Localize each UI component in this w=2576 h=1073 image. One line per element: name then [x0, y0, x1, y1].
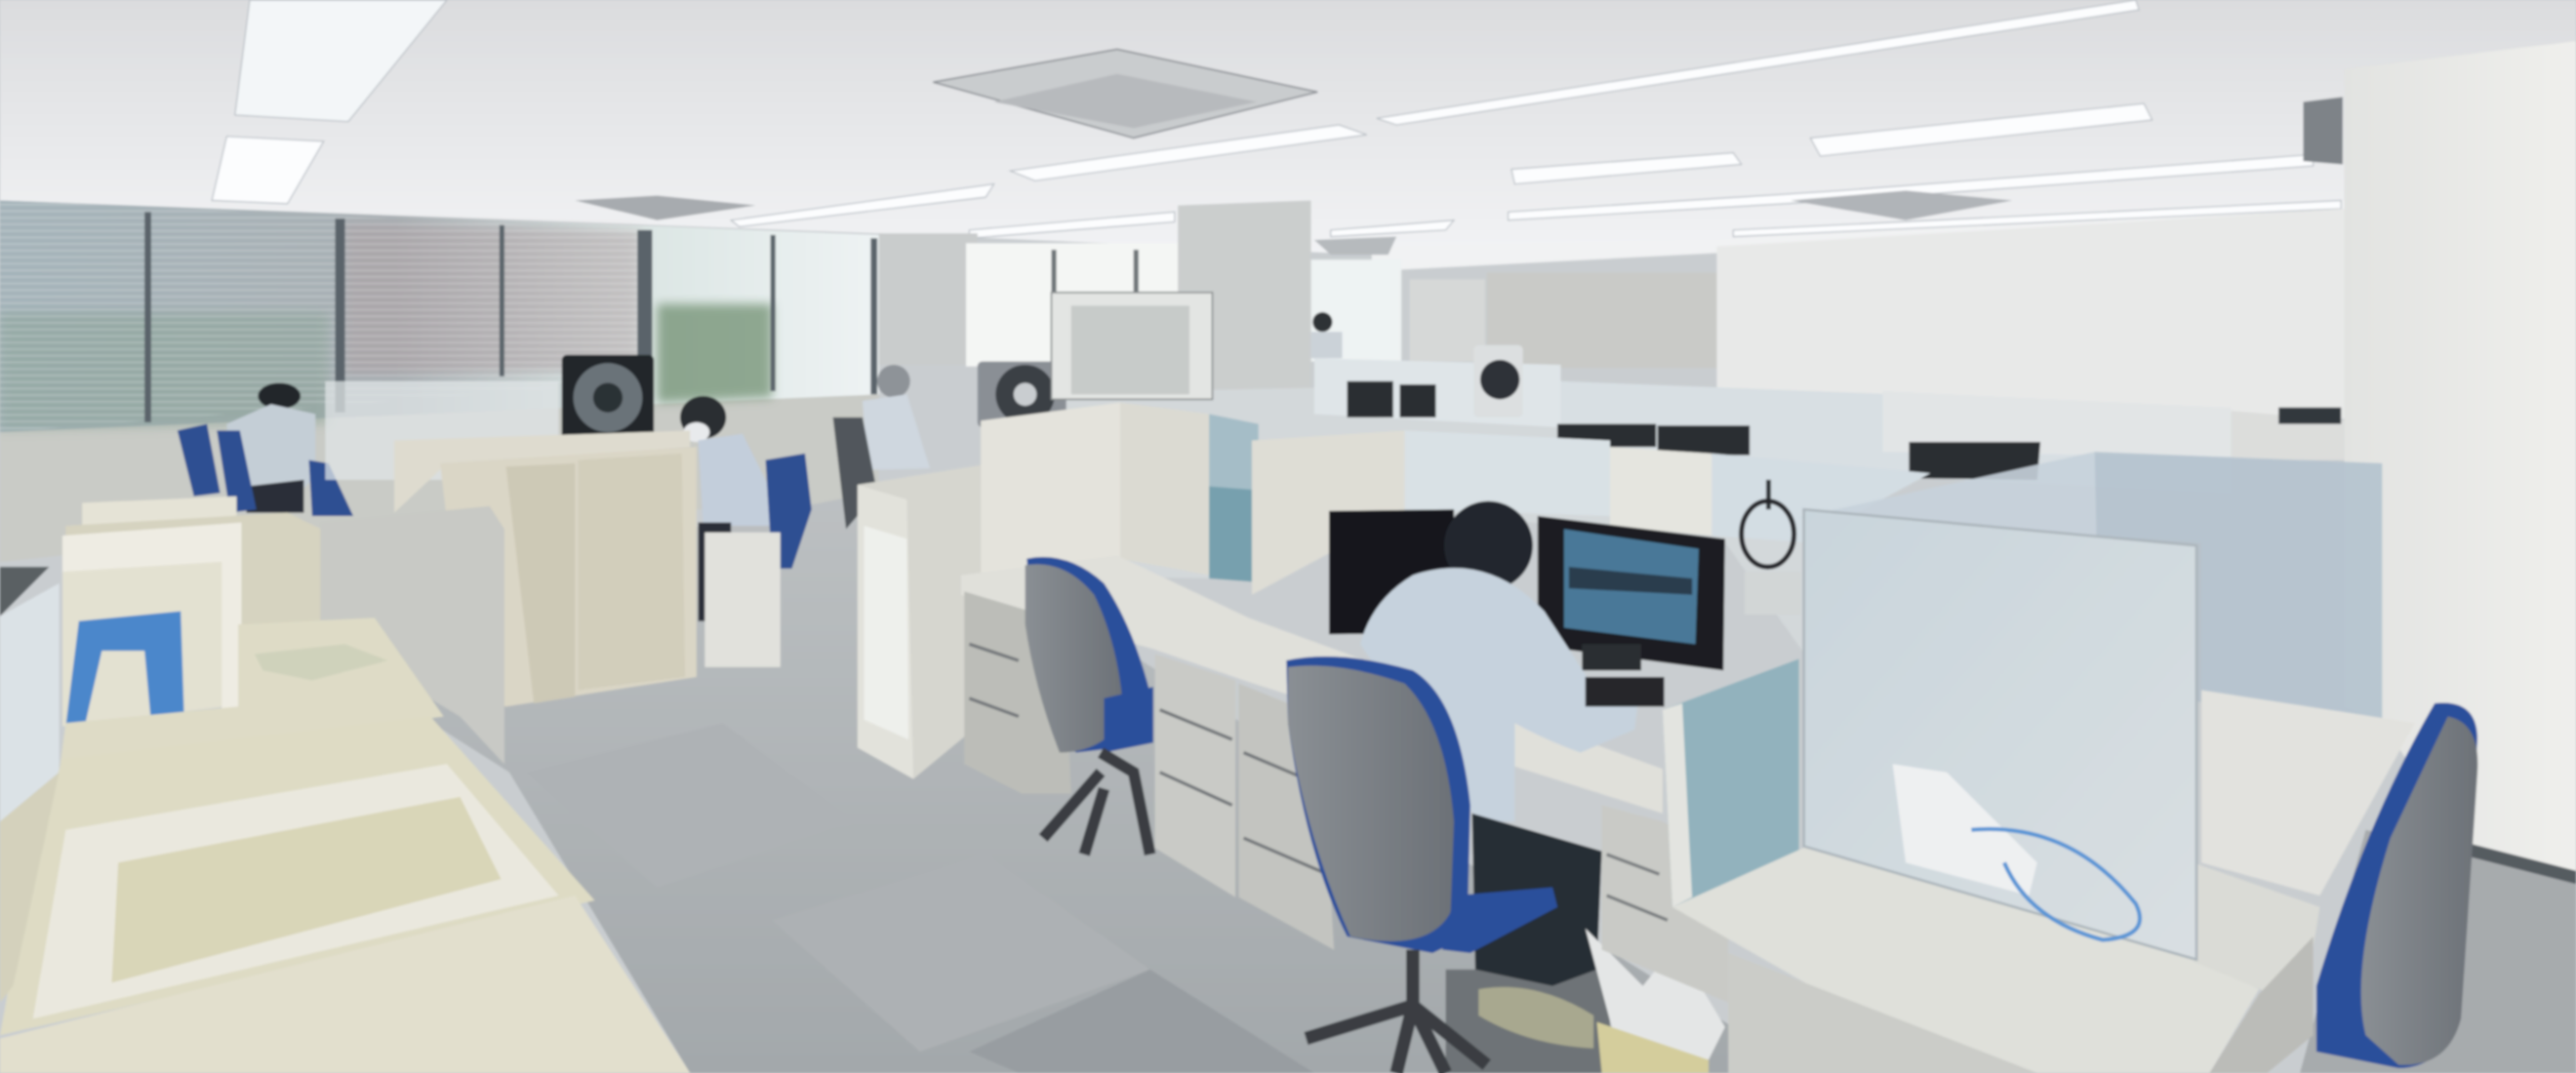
right blue office chair [2316, 702, 2477, 1068]
left blue office chair [1026, 557, 1153, 854]
back partition glass [1314, 358, 2231, 493]
blue partition [1663, 658, 1799, 907]
glass partition back right [1799, 452, 2382, 723]
floor [0, 493, 2576, 1073]
near desk [1672, 691, 2415, 1073]
storage cabinet [394, 430, 697, 706]
windows with blinds [0, 201, 879, 432]
blue bookend [65, 612, 184, 727]
back monitors [1348, 381, 2040, 480]
worker with mask [680, 396, 812, 667]
back right wall [1716, 209, 2345, 419]
ceiling lights [212, 0, 2341, 238]
back wall and far windows [879, 233, 1716, 368]
centre partitions [981, 403, 1930, 595]
right column wall [2345, 41, 2576, 871]
center pillar [1178, 201, 1311, 394]
main monitors [1329, 509, 1725, 670]
main worker [1360, 501, 1665, 1049]
centre filing unit [858, 465, 981, 778]
standing worker in distance [1311, 312, 1343, 358]
desk fan right [1473, 345, 1523, 417]
frosted glass partition front [1804, 509, 2196, 960]
left wall below windows [0, 391, 879, 562]
wastebasket with plastic bag [1586, 929, 1725, 1073]
worker in back [833, 365, 930, 529]
left near cabinets [0, 497, 504, 821]
black desk fan left [552, 355, 654, 451]
left low counter top [0, 617, 690, 1073]
cubicle cables and headset [1742, 480, 1800, 615]
desk fan centre [978, 362, 1067, 427]
workers at far left [178, 381, 558, 516]
ceiling [0, 0, 2576, 271]
ceiling air conditioners [575, 50, 2013, 255]
back desk tops [986, 388, 1807, 657]
centre desk [961, 555, 1663, 950]
main office chair [1286, 656, 1557, 1073]
whiteboard [1052, 293, 1213, 399]
near desk drawers [1602, 805, 1728, 1003]
